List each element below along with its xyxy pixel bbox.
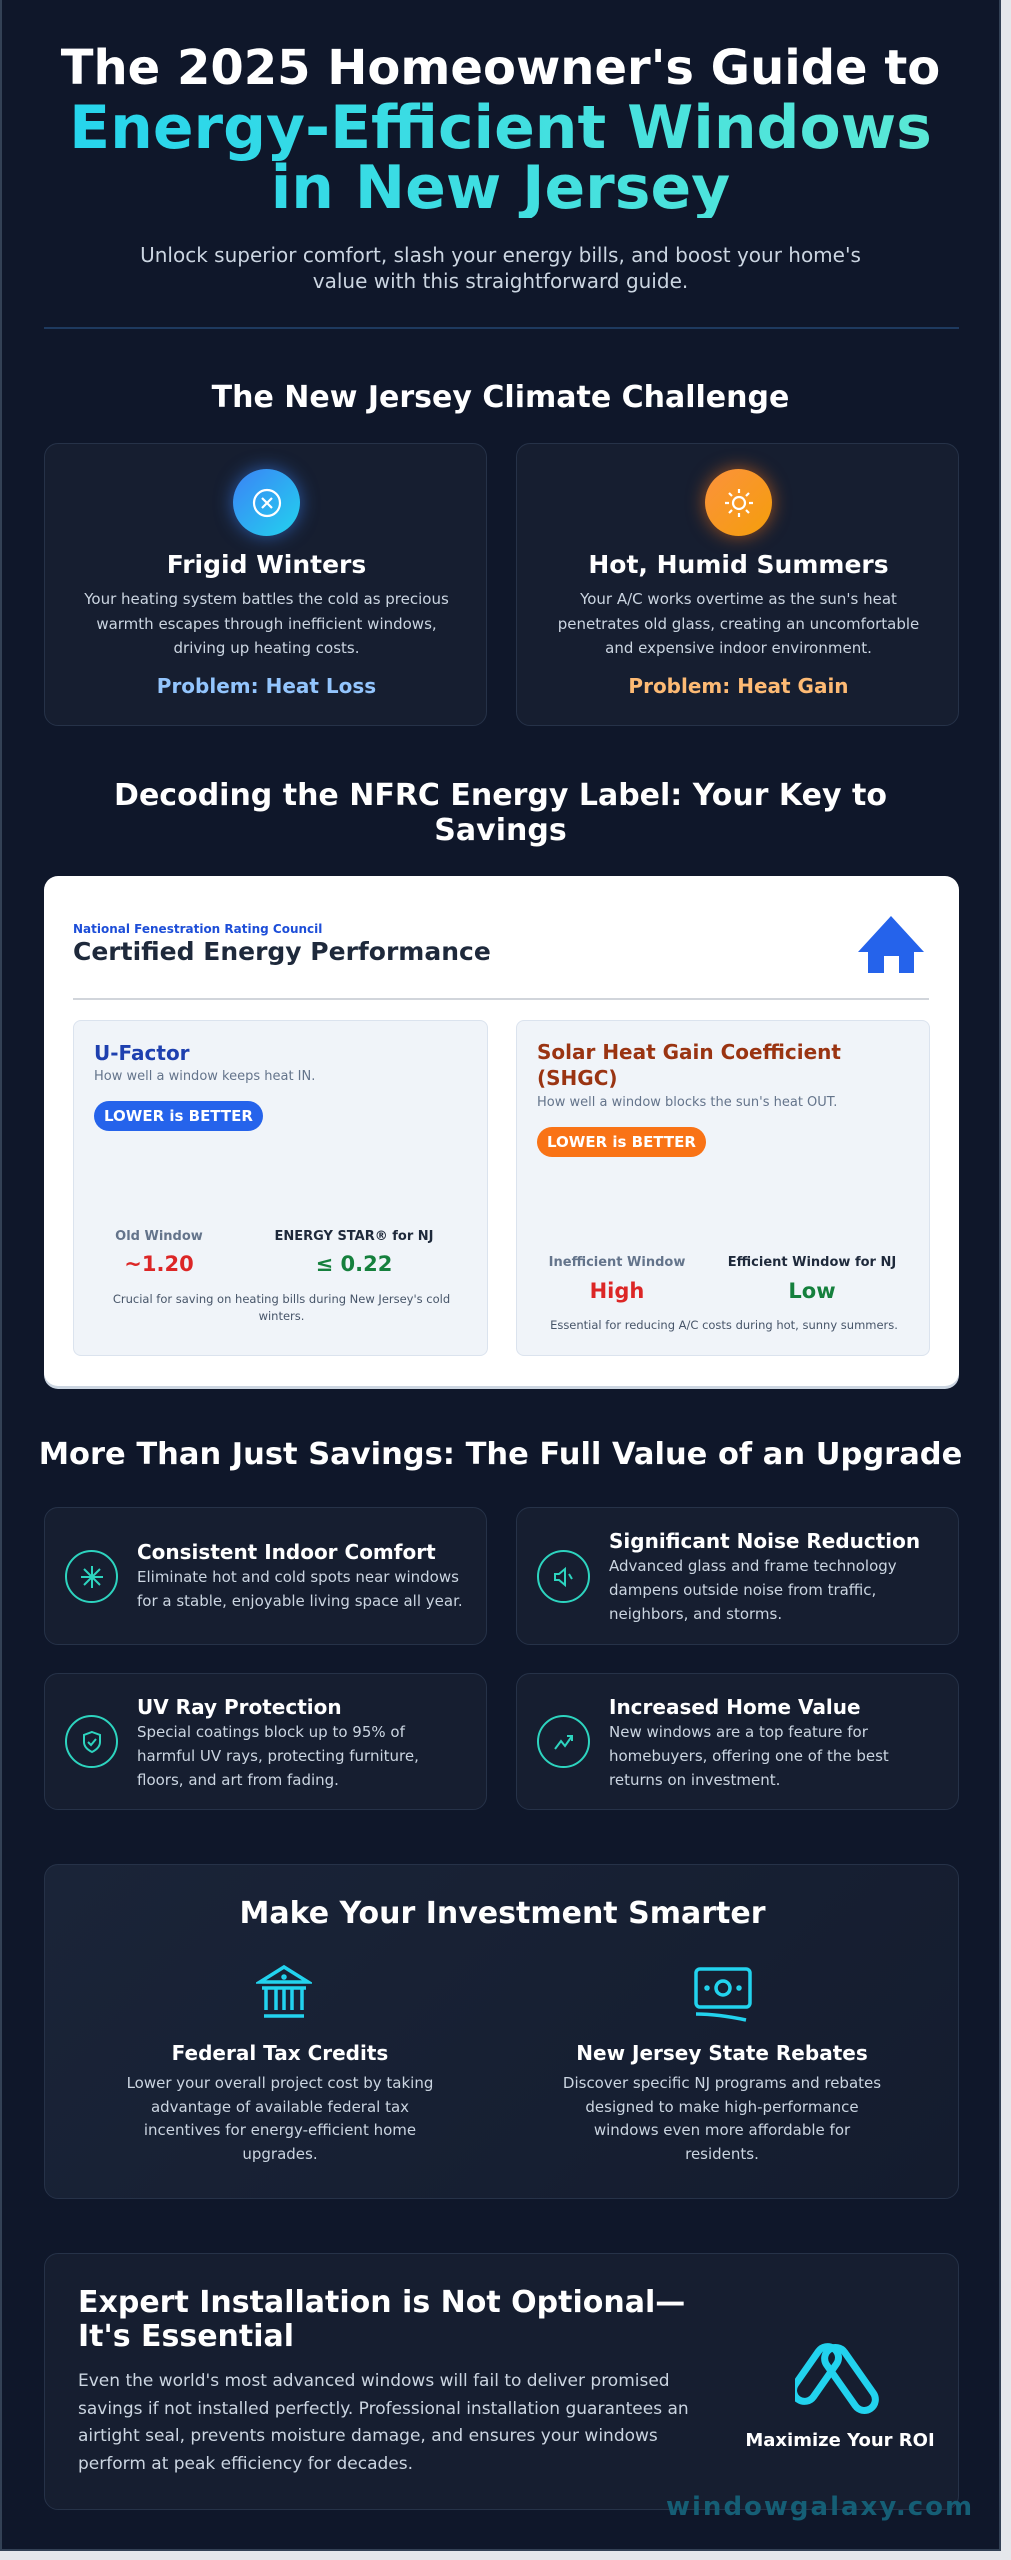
pill <box>94 1101 263 1131</box>
title: The 2025 Homeowner's Guide to <box>61 40 940 96</box>
heading: Hot, Humid Summers <box>588 550 889 579</box>
panel: noise: Significant Noise Reduction <box>609 1529 920 1553</box>
panel: comfort: Consistent Indoor Comfort <box>137 1540 436 1564</box>
box: U-Factor: ENERGY STAR® for NJ <box>274 1229 434 1244</box>
panel: investment: Lower your overall project cost by taking advantage of available federal tax incentives for energy-efficient home upgrades. <box>127 2074 433 2162</box>
heading: Frigid Winters <box>167 550 366 579</box>
box: U-Factor: U-Factor <box>94 1041 190 1065</box>
heading: climate: The New Jersey Climate Challenge <box>212 380 789 415</box>
panel: home value <box>516 1673 959 1810</box>
box: SHGC: Essential for reducing A/C costs during hot, sunny summers. <box>550 1318 898 1332</box>
box: U-Factor: ~1.20 <box>124 1252 194 1276</box>
pill: LOWER is BETTER <box>104 1107 253 1125</box>
panel: investment <box>44 1864 959 2199</box>
pill <box>537 1127 706 1157</box>
icon: ROI <box>795 2343 879 2414</box>
heading: Make Your Investment Smarter <box>240 1896 765 1931</box>
box: U-Factor: ≤ 0.22 <box>316 1252 392 1276</box>
box: SHGC: High <box>590 1279 644 1303</box>
problem: Problem: Heat Gain <box>628 674 849 698</box>
icon: sun <box>705 469 772 536</box>
caption: Maximize Your ROI <box>745 2430 935 2451</box>
pill: LOWER is BETTER <box>547 1133 696 1151</box>
title highlight: in New Jersey <box>271 153 730 223</box>
box: U-Factor <box>73 1020 488 1356</box>
box: SHGC: How well a window blocks the sun's heat OUT. <box>537 1095 837 1110</box>
panel: UV <box>44 1673 487 1810</box>
watermark: windowgalaxy.com <box>666 2492 974 2522</box>
panel: UV: UV Ray Protection <box>137 1695 342 1719</box>
panel: investment: Discover specific NJ programs and rebates designed to make high-performance windows even more affordable for residents. <box>563 2074 881 2162</box>
box: SHGC: Efficient Window for NJ <box>728 1255 896 1270</box>
panel: home value: Increased Home Value <box>609 1695 861 1719</box>
label org: National Fenestration Rating Council <box>73 922 322 936</box>
text: Your A/C works overtime as the sun's heat penetrates old glass, creating an uncomfortable and expensive indoor environment. <box>558 590 919 657</box>
box: SHGC: Inefficient Window <box>549 1255 685 1270</box>
title highlight <box>0 98 1001 218</box>
heading: NFRC: Decoding the NFRC Energy Label: Your Key to Savings <box>114 778 887 848</box>
panel: comfort <box>44 1507 487 1645</box>
text: Your heating system battles the cold as precious warmth escapes through inefficient windows, driving up heating costs. <box>84 590 449 657</box>
icon: money <box>694 1967 752 2022</box>
icon: house <box>858 916 924 973</box>
box: SHGC <box>516 1020 930 1356</box>
panel: comfort: Eliminate hot and cold spots near windows for a stable, enjoyable living space all year. <box>137 1568 463 1610</box>
panel: NFRC label <box>44 876 959 1386</box>
body: Even the world's most advanced windows will fail to deliver promised savings if not installed perfectly. Professional installation guarantees an airtight seal, prevents moisture damage, and ensures your windows perform at peak efficiency for decades. <box>78 2371 689 2474</box>
panel: noise: Advanced glass and frame technology dampens outside noise from traffic, neighbors, and storms. <box>609 1557 897 1623</box>
panel: noise <box>516 1507 959 1645</box>
box: U-Factor: Crucial for saving on heating bills during New Jersey's cold winters. <box>113 1292 450 1323</box>
heading: Expert Installation is Not Optional—It's Essential <box>78 2285 685 2354</box>
panel: summers <box>516 443 959 726</box>
icon: snow <box>233 469 300 536</box>
heading: full value: More Than Just Savings: The Full Value of an Upgrade <box>39 1437 962 1472</box>
sub: federal: Federal Tax Credits <box>172 2041 388 2065</box>
problem: Problem: Heat Loss <box>157 674 376 698</box>
box: SHGC: Solar Heat Gain Coefficient (SHGC) <box>537 1040 841 1090</box>
subtitle: Unlock superior comfort, slash your energy bills, and boost your home's value with this straightforward guide. <box>140 243 861 293</box>
title highlight: Energy-Efficient Windows <box>69 93 932 163</box>
box: U-Factor: Old Window <box>115 1229 203 1244</box>
box: U-Factor: How well a window keeps heat IN. <box>94 1069 315 1084</box>
icon: bank <box>256 1964 312 2018</box>
sub: rebates: New Jersey State Rebates <box>576 2041 868 2065</box>
panel: winters <box>44 443 487 726</box>
label title: Certified Energy Performance <box>73 937 491 966</box>
panel: expert installation <box>44 2253 959 2510</box>
box: SHGC: Low <box>788 1279 836 1303</box>
panel: home value: New windows are a top feature for homebuyers, offering one of the best returns on investment. <box>609 1723 889 1789</box>
panel: UV: Special coatings block up to 95% of harmful UV rays, protecting furniture, floors, and art from fading. <box>137 1723 419 1789</box>
